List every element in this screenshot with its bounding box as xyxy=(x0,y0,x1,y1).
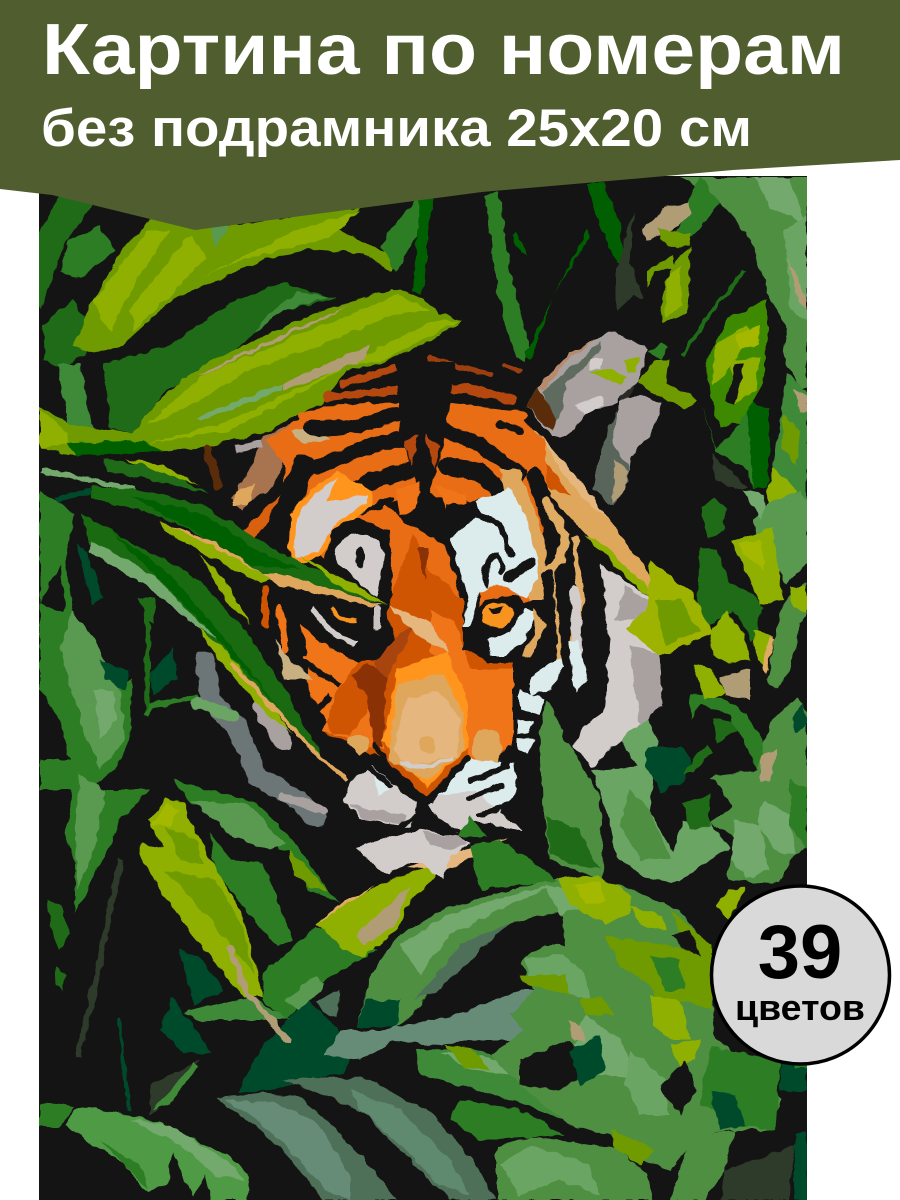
neck stripes xyxy=(523,500,600,735)
left eye xyxy=(265,585,395,715)
tiger head xyxy=(207,359,600,880)
forehead black markings xyxy=(242,407,551,532)
badge: 39 colours xyxy=(712,886,890,1064)
grey fur tufts xyxy=(197,660,323,817)
left white cheek xyxy=(288,472,372,565)
foliage: lower right cluster xyxy=(470,693,807,1200)
foliage: bright main leaf xyxy=(40,289,463,456)
nose bridge xyxy=(323,534,513,795)
left eye patch xyxy=(325,518,392,610)
banner xyxy=(0,0,900,230)
grass blades across face xyxy=(40,459,387,780)
foliage: lower left leaves xyxy=(138,780,577,1093)
tiger body and tan shoulder stripe xyxy=(533,430,750,768)
foliage: mid left plant xyxy=(40,490,200,1115)
foliage: bottom fern leaves xyxy=(40,990,653,1200)
badge: 39 colours: цветов xyxy=(735,987,865,1028)
foliage: top center grass blades xyxy=(485,182,745,362)
foliage: upper right column xyxy=(643,177,807,690)
painting: tiger in jungle xyxy=(30,176,807,1200)
muzzle and chin xyxy=(342,745,523,880)
right eye xyxy=(462,595,547,659)
forehead stripes xyxy=(303,359,523,416)
right white mask xyxy=(500,470,548,600)
title: Картина по номерам xyxy=(42,10,845,90)
head side fur xyxy=(231,420,297,510)
tiger ear xyxy=(527,333,698,505)
subtitle: без подрамника 25х20 см xyxy=(41,99,752,158)
foliage: top left leaves xyxy=(30,190,433,433)
badge: 39 colours: 39 xyxy=(758,910,842,995)
